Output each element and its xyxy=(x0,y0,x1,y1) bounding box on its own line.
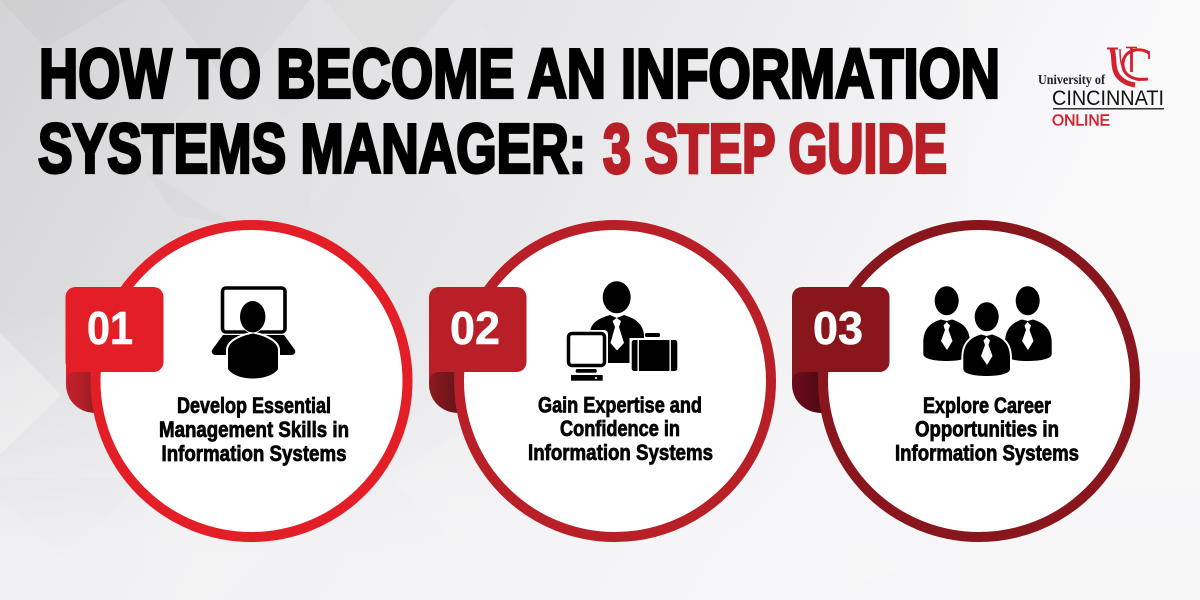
icon: person at monitor xyxy=(212,288,295,378)
logo text: Cincinnati: CINCINNATI xyxy=(1052,87,1164,110)
panel: step 2 xyxy=(429,225,771,537)
step text xyxy=(528,392,713,465)
title highlight: 3 STEP GUIDE xyxy=(603,110,947,188)
ring xyxy=(96,225,408,537)
step text: Gain Expertise and xyxy=(538,392,702,418)
ring xyxy=(823,225,1135,537)
step text: Information Systems xyxy=(895,440,1079,466)
logo divider xyxy=(1053,108,1164,110)
ribbon tail xyxy=(429,360,459,382)
number tab xyxy=(792,287,890,372)
number tab xyxy=(66,287,164,372)
ribbon fold xyxy=(429,372,463,413)
number tab xyxy=(429,287,526,372)
step text: Information Systems xyxy=(528,440,713,465)
step text xyxy=(159,393,349,466)
step text: Develop Essential xyxy=(177,393,331,418)
number: 01 xyxy=(87,302,133,354)
icon: group of three people xyxy=(923,286,1052,376)
number: 02 xyxy=(450,302,500,354)
icon: manager with computer and briefcase xyxy=(565,281,680,381)
logo: University of Cincinnati Online xyxy=(1038,47,1164,130)
ring xyxy=(459,225,771,537)
step text: Explore Career xyxy=(923,393,1051,418)
title xyxy=(38,34,1000,188)
ribbon tail xyxy=(66,360,96,382)
panel: step 3 xyxy=(792,225,1135,537)
logo text: Online: ONLINE xyxy=(1052,112,1110,130)
step text: Information Systems xyxy=(162,441,346,466)
number: 03 xyxy=(813,302,863,354)
step text: Opportunities in xyxy=(915,416,1059,442)
ribbon tail xyxy=(792,360,822,382)
panel: step 1 xyxy=(66,225,408,537)
step text: Management Skills in xyxy=(159,417,349,442)
step text xyxy=(895,393,1079,466)
title line 2: SYSTEMS MANAGER: xyxy=(38,110,586,188)
ribbon fold xyxy=(792,372,826,413)
ribbon fold xyxy=(66,372,100,413)
logo text: University of: University of xyxy=(1038,72,1105,87)
icon: UC monogram xyxy=(1107,47,1149,85)
step text: Confidence in xyxy=(560,416,680,441)
